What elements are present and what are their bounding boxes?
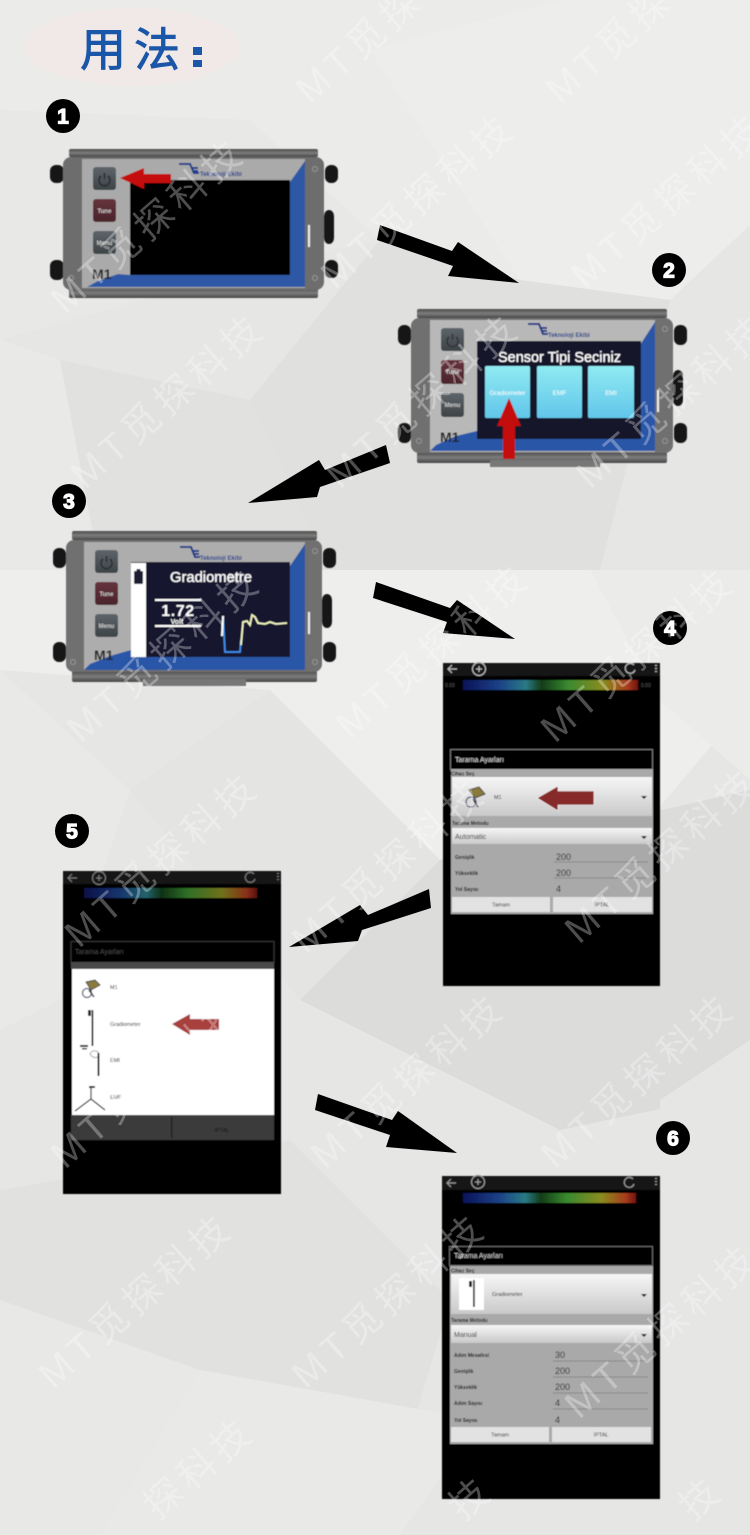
sensor card: Gradiometer: Gradiometer (489, 390, 526, 397)
screen heading: Sensor Tipi Seciniz (498, 349, 621, 366)
settings dialog: Adım Mesafesi (454, 1353, 490, 1359)
watermarks: MT觅探科技 (533, 986, 744, 1177)
screen (130, 180, 290, 275)
arrow: maroon pointing to M1 (537, 786, 594, 811)
settings dialog: Genişlik (455, 855, 475, 861)
toolbar icons (448, 662, 656, 676)
step 2: sensor selection device (398, 309, 687, 467)
settings dialog: Tarama Ayarları (455, 757, 504, 764)
settings dialog: 4 (555, 1398, 560, 1408)
arrow: red pointing to power key (120, 168, 171, 189)
watermarks: MT觅探科技 (59, 560, 270, 751)
watermarks: MT觅探科技 (63, 306, 274, 497)
knobs (398, 325, 687, 443)
logo (528, 324, 590, 339)
keys: Menu (445, 403, 461, 409)
settings dialog: 200 (555, 1382, 570, 1392)
step 6 badge: 6 (667, 1128, 679, 1150)
watermarks: MT觅探科技 (43, 131, 254, 322)
step 2 badge: 2 (663, 260, 675, 282)
watermarks: 探科技 (136, 1409, 264, 1528)
arrow 5 to 6 (315, 1094, 457, 1153)
step 1 badge (46, 99, 80, 133)
colour scale (463, 1193, 636, 1203)
watermarks: MT觅探科技 (57, 765, 268, 956)
settings dialog: 4 (556, 884, 561, 894)
settings dialog: Automatic (455, 834, 487, 841)
colour scale: 0.00 (641, 683, 651, 689)
logo (179, 164, 242, 178)
battery strip (131, 563, 146, 657)
step 2: sensor selection device: M1 (440, 429, 460, 445)
title blob (24, 8, 240, 86)
keys: Tune (100, 592, 114, 598)
step 1: device powered off (50, 149, 338, 298)
arrow 1 to 2 (377, 225, 519, 283)
watermarks: MT觅探科技 (31, 1206, 242, 1397)
keys: Tune (446, 370, 460, 376)
dimmed dialog: İPTAL (215, 1127, 229, 1134)
step 4: phone settings screen (443, 662, 660, 986)
settings dialog: Yükseklik (454, 1385, 477, 1391)
icon: gradiometer thumbnail (459, 1278, 484, 1310)
settings dialog: Manual (454, 1332, 477, 1339)
settings dialog: Yükseklik (455, 871, 478, 877)
settings dialog: Adım Sayısı (454, 1401, 483, 1407)
step 5 badge (55, 814, 89, 848)
settings dialog: İPTAL (594, 1432, 608, 1438)
arrow: red pointing to Gradiometer (172, 1014, 219, 1035)
step 1 badge: 1 (57, 106, 69, 128)
sensor card: EMF (537, 366, 582, 418)
step 3 badge (52, 484, 86, 518)
dimmed dialog: Tarama Ayarları (75, 949, 124, 956)
watermarks: MT觅探科技 (533, 560, 744, 751)
knobs (50, 165, 338, 280)
watermarks: MT觅探科技 (328, 556, 539, 747)
watermarks: MT觅探科技 (43, 986, 254, 1177)
step 1: device powered off: M1 (92, 266, 112, 282)
keys (95, 550, 118, 637)
list item: M1 (82, 980, 118, 998)
toolbar icons (68, 872, 278, 884)
settings dialog: Yol Sayısı (454, 1418, 478, 1424)
settings dialog: Yol Sayısı (455, 887, 479, 893)
watermarks: MT觅探科技 (303, 986, 514, 1177)
watermarks: MT觅探科技 (313, 106, 524, 297)
knobs (53, 548, 336, 662)
settings dialog: 200 (556, 868, 571, 878)
step 3 badge: 3 (63, 490, 75, 514)
logo (180, 547, 242, 562)
list item: EMF (75, 1086, 122, 1111)
watermarks: MT觅探科技 (284, 771, 495, 962)
settings dialog: Tarama Metodu (452, 821, 489, 827)
screen (131, 562, 290, 657)
arrow 2 to 3 (248, 445, 390, 503)
settings dialog (450, 750, 653, 914)
keys (93, 167, 116, 254)
icon: M1 device (466, 787, 485, 807)
step 4 badge (653, 611, 687, 645)
signal chart (222, 615, 287, 652)
step 6 badge (656, 1121, 690, 1155)
step 5: phone sensor list (63, 871, 281, 1194)
settings dialog: Tarama Ayarları (454, 1253, 503, 1260)
watermarks: 技 (441, 1468, 502, 1529)
sensor card: EMF: EMF (553, 390, 566, 397)
settings dialog: Genişlik (454, 1369, 474, 1375)
arrow 4 to 5 (289, 889, 431, 947)
logo: Teknoloji Ekibi (200, 556, 242, 562)
sensor list (72, 969, 274, 1115)
keys: Menu (99, 624, 115, 630)
settings dialog: Tarama Metodu (451, 1318, 488, 1324)
keys (441, 328, 464, 417)
title: 用法 (80, 14, 188, 80)
arrow: red pointing up (497, 398, 521, 459)
colour scale: 0.00 (445, 683, 455, 689)
settings dialog: Cihaz Seç (451, 1268, 475, 1274)
list item: Gradiometer: Gradiometer (110, 1022, 141, 1028)
step 2 badge (652, 253, 686, 287)
step 5 badge: 5 (66, 820, 78, 844)
watermarks: MT觅探科技 (284, 1206, 495, 1397)
list item: Gradiometer (88, 1010, 141, 1046)
step 3: gradiometre reading device: M1 (94, 647, 114, 663)
watermarks: 技 (671, 1468, 732, 1529)
screen (477, 341, 641, 439)
list item: EMI (80, 1045, 120, 1076)
settings dialog: Cihaz Seç (451, 772, 475, 778)
colour scale (445, 680, 651, 690)
settings dialog: 4 (555, 1415, 560, 1425)
arrow 3 to 4 (373, 582, 515, 639)
sensor card: Gradiometer (485, 366, 530, 418)
settings dialog: 30 (555, 1350, 565, 1360)
step 4 badge: 4 (664, 618, 676, 640)
settings dialog: Tamam (492, 902, 510, 908)
dimmed dialog (71, 942, 274, 1140)
voltage reading: Volt (171, 619, 184, 626)
keys: Tune (98, 209, 112, 215)
step 3: gradiometre reading device (53, 531, 336, 686)
settings dialog (450, 1246, 653, 1444)
toolbar icons (447, 1176, 656, 1188)
list item: EMF: EMF (110, 1095, 122, 1101)
watermarks: MT觅探科技 (318, 306, 529, 497)
settings dialog: İPTAL (595, 902, 609, 908)
list item: EMI: EMI (110, 1058, 120, 1064)
voltage reading: 1.72 (161, 603, 195, 620)
settings dialog: Tamam (491, 1432, 509, 1438)
settings dialog: 200 (555, 1366, 570, 1376)
list item: M1: M1 (110, 985, 118, 991)
keys: Menu (97, 241, 113, 247)
step 6: phone manual settings (442, 1176, 660, 1499)
logo: Teknoloji Ekibi (200, 172, 242, 178)
sensor card: EMI: EMI (605, 390, 617, 397)
settings dialog: Gradiometer (492, 1292, 523, 1298)
sensor card: EMI (588, 366, 634, 418)
voltage reading (155, 599, 201, 627)
settings dialog: M1 (494, 795, 502, 801)
logo: Teknoloji Ekibi (548, 333, 590, 339)
settings dialog: 200 (556, 852, 571, 862)
colour scale (84, 888, 257, 898)
reading heading: Gradiometre (170, 569, 252, 586)
